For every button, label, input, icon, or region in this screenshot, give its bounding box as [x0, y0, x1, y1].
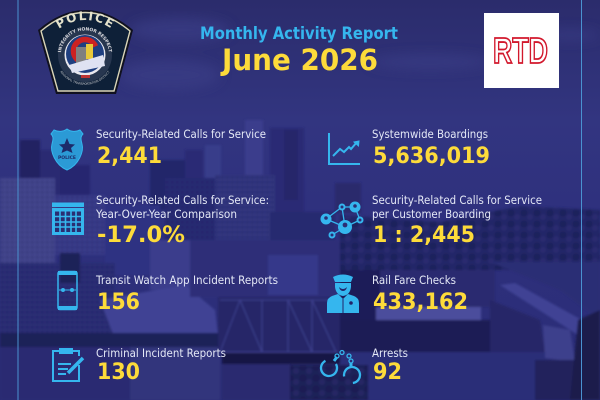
stat: transit watch: Transit Watch App Incident Reports — [95, 273, 278, 287]
stat: security calls — [51, 127, 266, 170]
stat: criminal reports — [53, 346, 226, 385]
stat: year-over-year — [52, 193, 269, 248]
logo: police patch: INTEGRITY HONOR RESPECT — [58, 27, 112, 52]
logo: RTD: RTD — [493, 30, 548, 71]
icon: line chart — [329, 133, 360, 164]
stat: calls per boarding: per Customer Boarding — [372, 207, 491, 221]
icon: handcuffs — [318, 350, 361, 384]
stat: boardings: Systemwide Boardings — [372, 127, 488, 141]
stat: security calls: 2,441 — [97, 144, 162, 169]
icon: police shield: POLICE — [58, 155, 76, 161]
icon: clipboard — [53, 349, 83, 381]
date heading: June 2026 — [220, 43, 378, 77]
stat: transit watch: 156 — [97, 290, 140, 315]
stat: fare checks — [327, 273, 468, 315]
stat: year-over-year: Year-Over-Year Comparison — [95, 207, 237, 221]
title: Monthly Activity Report — [200, 24, 398, 44]
stat: boardings — [329, 127, 490, 169]
logo: RTD — [484, 13, 559, 88]
stat: transit watch — [58, 271, 278, 315]
stat: calls per boarding: Security-Related Calls for Service — [372, 193, 542, 207]
icon: smartphone — [58, 271, 77, 310]
stat: calls per boarding: 1 : 2,445 — [373, 223, 475, 248]
stat: fare checks: Rail Fare Checks — [372, 273, 456, 287]
stat: arrests: 92 — [373, 360, 402, 385]
logo: police patch — [38, 10, 133, 94]
icon: people network — [320, 202, 364, 238]
stat: criminal reports: 130 — [97, 360, 140, 385]
stat: security calls: Security-Related Calls for Service — [96, 127, 266, 141]
stat: arrests: Arrests — [372, 346, 408, 360]
icon: police shield — [51, 129, 83, 170]
stat: fare checks: 433,162 — [373, 290, 468, 315]
stat: calls per boarding — [320, 193, 542, 248]
icon: police officer — [327, 274, 359, 313]
logo: police patch: REGIONAL TRANSPORTATION DISTRICT — [60, 70, 110, 85]
stat: year-over-year: -17.0% — [97, 223, 185, 248]
stat: boardings: 5,636,019 — [373, 144, 490, 169]
stat: year-over-year: Security-Related Calls for Service: — [96, 193, 269, 207]
stat: arrests — [318, 346, 408, 385]
stat: criminal reports: Criminal Incident Reports — [96, 346, 226, 360]
logo: police patch: POLICE — [56, 11, 114, 28]
icon: calendar — [52, 202, 84, 235]
